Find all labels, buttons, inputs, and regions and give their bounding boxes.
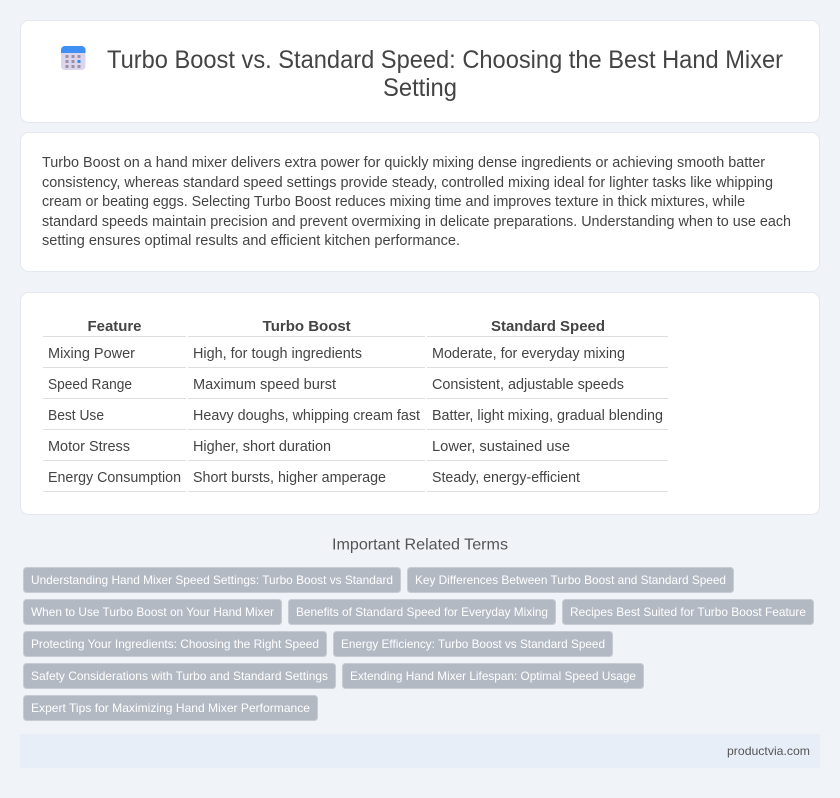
tag: When to Use Turbo Boost on Your Hand Mixer [31, 605, 274, 619]
table row: best use: Best Use [48, 408, 104, 424]
tag [24, 568, 400, 592]
text block: introduction: consistency, whereas standard speed settings provide steady, controlled mixing ideal for lighter tasks like whipping [42, 175, 773, 191]
tag: Benefits of Standard Speed for Everyday Mixing [296, 605, 548, 619]
icon: calendar [61, 46, 86, 70]
tag [342, 664, 644, 688]
table row: motor stress: Motor Stress [48, 439, 130, 455]
text block: introduction: cream or beating eggs. Selecting Turbo Boost reduces mixing time and improves texture in thick mixtures, while [42, 194, 745, 210]
table header: Turbo Boost [263, 319, 351, 335]
panel: related term tags [24, 568, 814, 720]
table row: energy consumption: Energy Consumption [48, 470, 181, 486]
tag [334, 632, 612, 656]
table header: Standard Speed [491, 319, 605, 335]
table row: motor stress: Lower, sustained use [432, 439, 570, 455]
panel: comparison table [20, 292, 820, 514]
table row: mixing power: Mixing Power [48, 346, 135, 362]
table row: speed range [48, 377, 624, 393]
tag [408, 568, 734, 592]
table row: speed range: Maximum speed burst [193, 377, 336, 393]
tag: Energy Efficiency: Turbo Boost vs Standard Speed [341, 637, 605, 651]
tag: Recipes Best Suited for Turbo Boost Feature [570, 605, 806, 619]
footer [20, 734, 820, 768]
title [107, 46, 783, 102]
panel: introduction [20, 132, 820, 272]
footer: productvia.com [727, 744, 810, 758]
title: Turbo Boost vs. Standard Speed: Choosing the Best Hand Mixer [107, 46, 783, 74]
table row: energy consumption [48, 470, 580, 486]
text block: introduction: setting ensures optimal results and efficient kitchen performance. [42, 233, 460, 249]
table header [88, 319, 605, 335]
table row: mixing power: Moderate, for everyday mixing [432, 346, 625, 362]
tag: Protecting Your Ingredients: Choosing the Right Speed [31, 637, 319, 651]
table row: best use [48, 408, 663, 424]
tag: Expert Tips for Maximizing Hand Mixer Performance [31, 701, 310, 715]
title: Setting [383, 74, 457, 102]
tag: Safety Considerations with Turbo and Standard Settings [31, 669, 328, 683]
tag [24, 600, 282, 624]
table row: motor stress: Higher, short duration [193, 439, 331, 455]
tag [288, 600, 556, 624]
table row: energy consumption: Steady, energy-efficient [432, 470, 580, 486]
panel: header [20, 20, 820, 122]
table row: motor stress [48, 439, 570, 455]
table header: Feature [88, 319, 142, 335]
table row: speed range: Consistent, adjustable speeds [432, 377, 624, 393]
table row: best use: Heavy doughs, whipping cream fast [193, 408, 420, 424]
text block: introduction: standard speeds maintain precision and prevent overmixing in delicate preparations. Understanding when to use each [42, 214, 791, 230]
heading: related terms: Important Related Terms [332, 536, 508, 554]
table row: energy consumption: Short bursts, higher amperage [193, 470, 386, 486]
tag [24, 664, 336, 688]
table row: speed range: Speed Range [48, 377, 132, 393]
tag [562, 600, 814, 624]
text block: introduction: Turbo Boost on a hand mixer delivers extra power for quickly mixing dense ingredients or achieving smooth batter [42, 155, 765, 171]
tag: Key Differences Between Turbo Boost and Standard Speed [415, 573, 726, 587]
table row: best use: Batter, light mixing, gradual blending [432, 408, 663, 424]
tag [24, 696, 318, 720]
table row: mixing power [48, 346, 625, 362]
tag: Extending Hand Mixer Lifespan: Optimal Speed Usage [350, 669, 636, 683]
table row: mixing power: High, for tough ingredients [193, 346, 362, 362]
text block: introduction [42, 155, 791, 249]
tag [24, 632, 326, 656]
tag: Understanding Hand Mixer Speed Settings: Turbo Boost vs Standard [31, 573, 393, 587]
